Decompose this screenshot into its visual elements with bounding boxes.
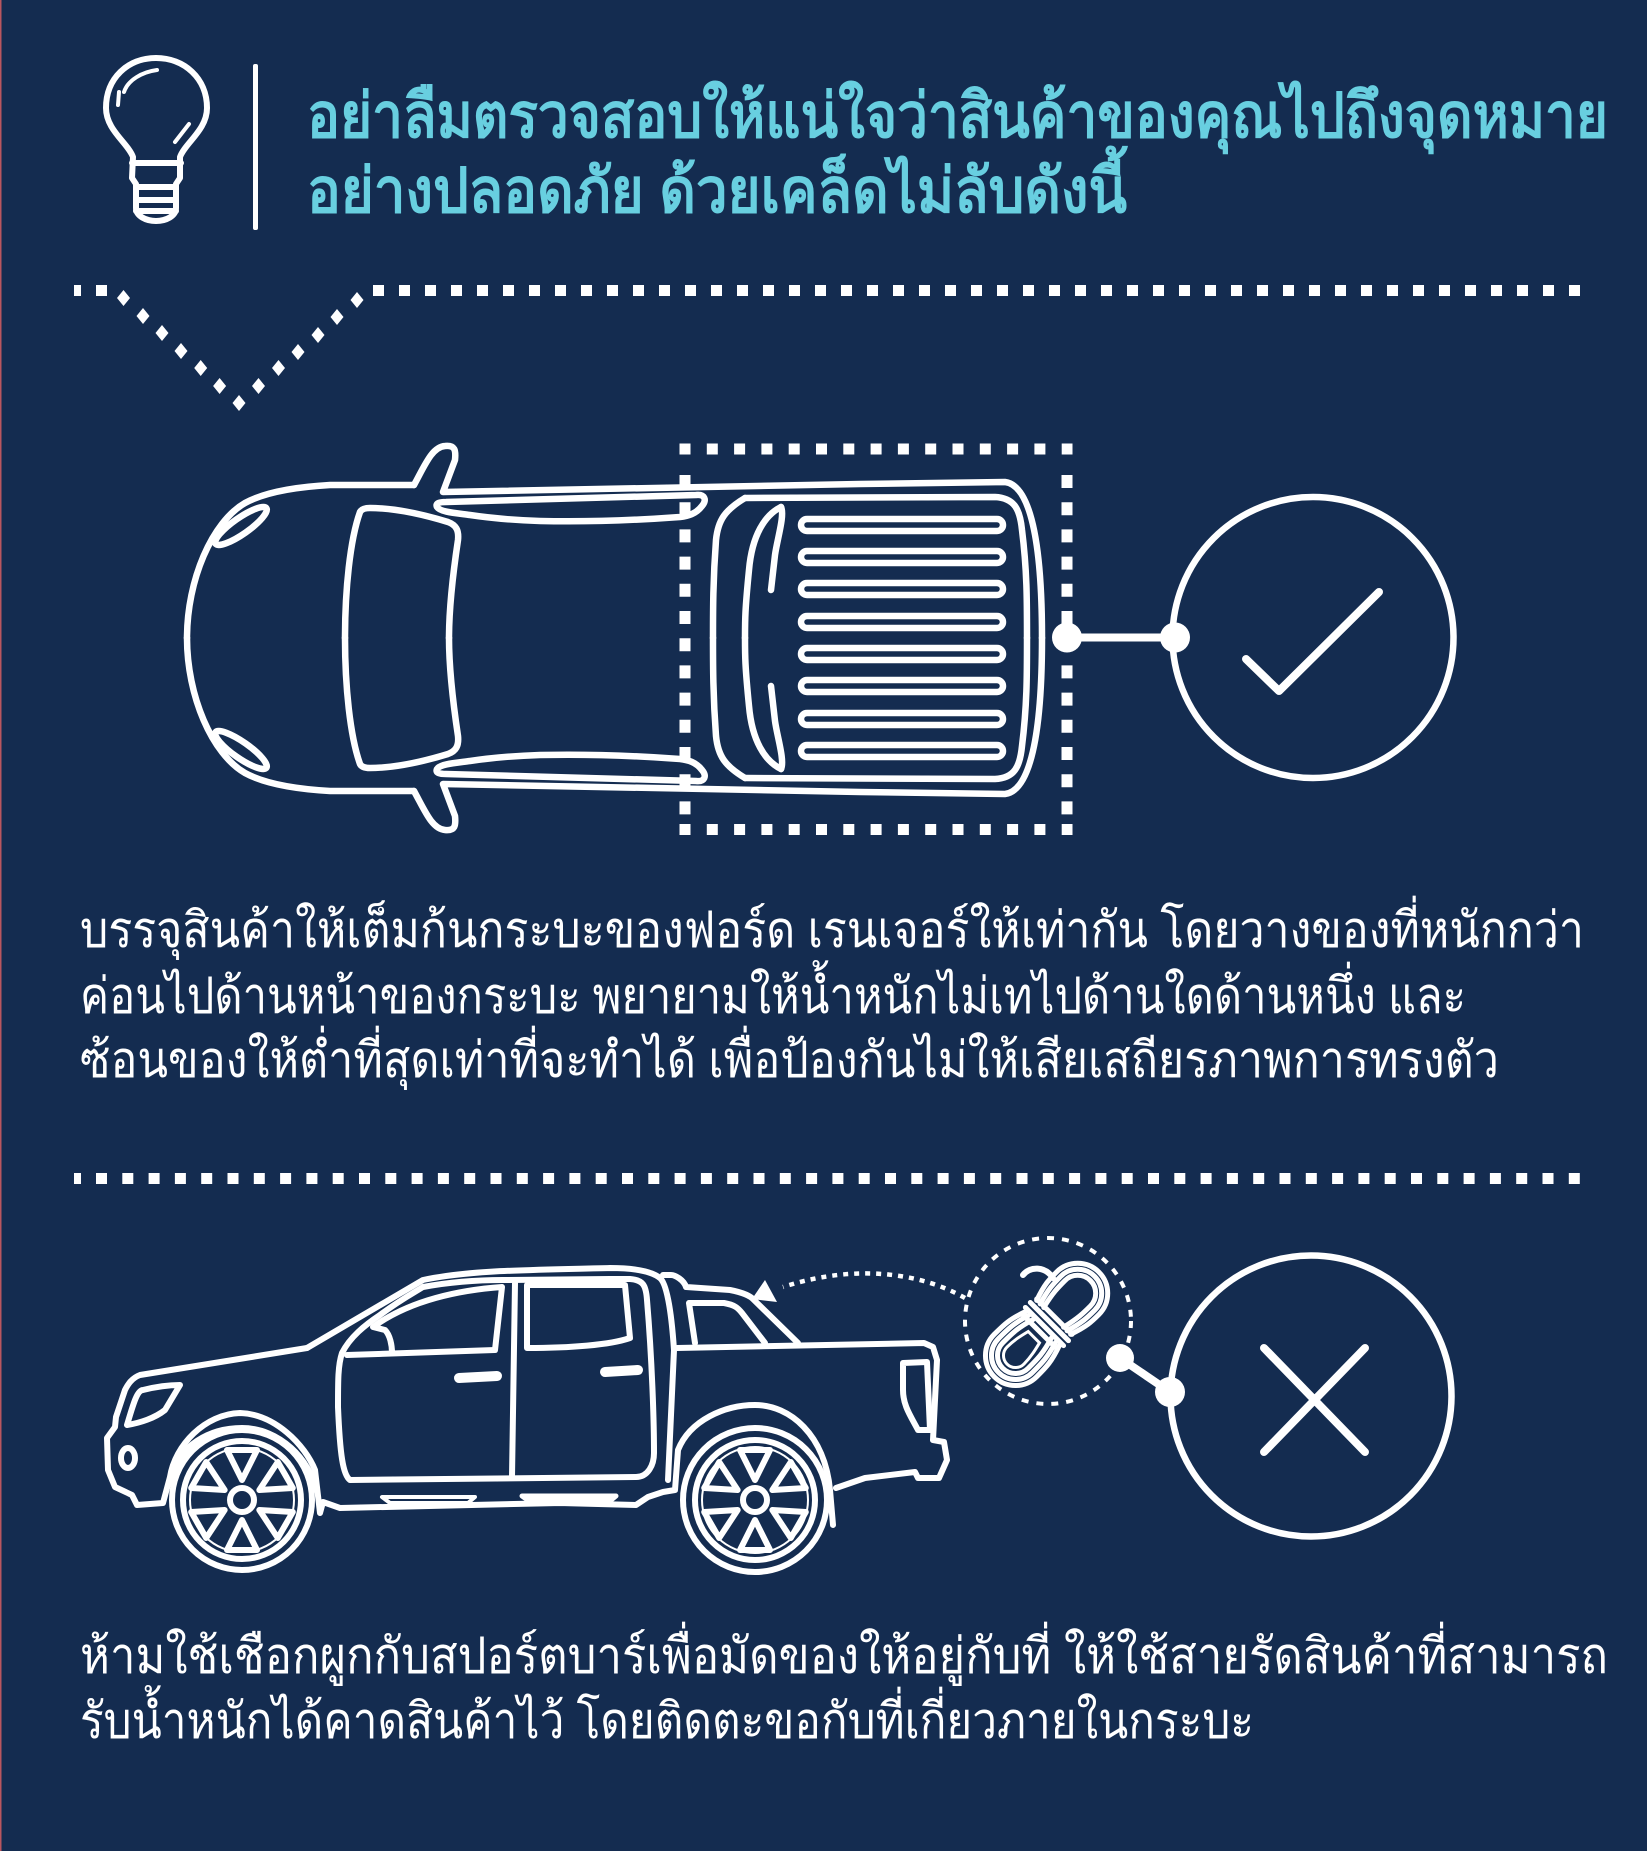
header divider bbox=[253, 64, 258, 230]
truck bed slats bbox=[801, 519, 1003, 757]
lamps bbox=[127, 1362, 930, 1430]
connector to check mark bbox=[1052, 622, 1190, 652]
truck body outline bbox=[107, 1343, 947, 1525]
icon: rope in dotted circle bbox=[965, 1238, 1131, 1404]
body text: tie down: รับน้ำหนักได้คาดสินค้าไว้ โดยติดตะขอกับที่เกี่ยวภายในกระบะ bbox=[80, 1685, 1254, 1749]
title bbox=[307, 80, 1608, 226]
side-view pickup truck bbox=[107, 1268, 947, 1572]
windows bbox=[347, 1287, 502, 1355]
connector to cross mark bbox=[1106, 1344, 1185, 1407]
roof line bbox=[307, 1268, 798, 1480]
truck upper half bbox=[187, 446, 1042, 638]
side steps bbox=[382, 1497, 475, 1503]
rear wheel bbox=[683, 1428, 827, 1572]
front wheel bbox=[170, 1428, 316, 1570]
title: อย่างปลอดภัย ด้วยเคล็ดไม่ลับดังนี้ bbox=[307, 145, 1129, 226]
body text: tie down bbox=[80, 1622, 1608, 1749]
truck lower half bbox=[187, 638, 1042, 830]
body text: load evenly: ค่อนไปด้านหน้าของกระบะ พยายามให้น้ำหนักไม่เทไปด้านใดด้านหนึ่ง และ bbox=[80, 960, 1466, 1024]
body text: load evenly bbox=[80, 896, 1584, 1090]
dotted arrow from rope to sport bar bbox=[752, 1273, 965, 1302]
door handles bbox=[459, 1376, 497, 1378]
icon: check mark circle bbox=[1172, 497, 1454, 778]
icon: cross mark circle bbox=[1170, 1256, 1452, 1536]
icon: light bulb bbox=[106, 58, 207, 221]
top-view pickup truck bbox=[187, 446, 1042, 830]
dotted divider bbox=[74, 1173, 1580, 1184]
body text: load evenly: ซ้อนของให้ต่ำที่สุดเท่าที่จะทำได้ เพื่อป้องกันไม่ให้เสียเสถียรภาพการทรงตัว bbox=[80, 1026, 1499, 1090]
dotted divider with arrow notch bbox=[74, 285, 1580, 411]
door outline bbox=[338, 1279, 654, 1480]
dotted highlight box around truck bed bbox=[680, 449, 1072, 830]
